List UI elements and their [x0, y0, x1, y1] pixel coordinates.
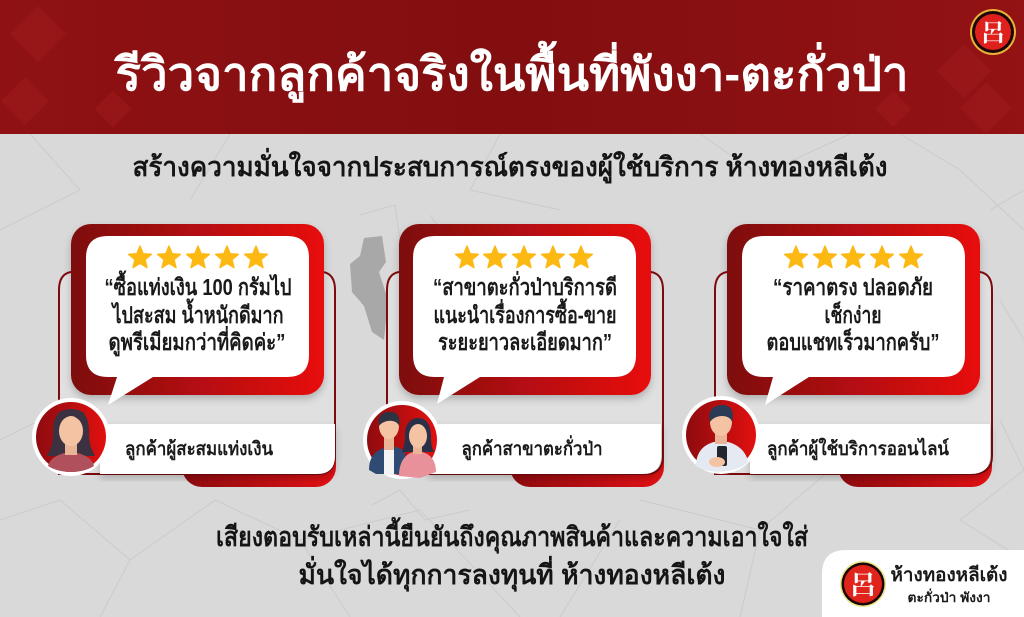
- icon: woman avatar: [32, 398, 110, 476]
- map silhouette: [350, 236, 388, 340]
- frame: [59, 272, 335, 474]
- quote text: ไปสะสม น้ำหนักดีมาก: [110, 298, 284, 328]
- icon: couple avatar: [363, 401, 441, 479]
- logo emblem: [840, 561, 886, 607]
- star rating: [456, 246, 592, 268]
- brand name: ห้างทองหลีเต้ง: [890, 564, 1008, 586]
- header banner: [0, 0, 1024, 134]
- quote text: “ซื้อแท่งเงิน 100 กรัมไป: [104, 270, 292, 300]
- background map lines: [0, 134, 1024, 617]
- frame: [715, 272, 992, 474]
- white name strip: [428, 424, 661, 474]
- lower red tab: [838, 400, 992, 487]
- quote text: ระยะยาวละเอียดมาก”: [438, 329, 612, 355]
- panel: review card 2: [363, 224, 664, 487]
- header logo: 呂: [981, 13, 1005, 48]
- quote text: ตอบแชทเร็วมากครับ”: [766, 327, 940, 355]
- quote text: [766, 274, 940, 355]
- icon: man with phone avatar: [682, 396, 760, 474]
- white name strip: [100, 424, 335, 474]
- star rating: [785, 246, 922, 268]
- white name strip: [750, 424, 990, 474]
- logo emblem: 呂: [850, 565, 876, 602]
- speech bubble: [413, 236, 636, 404]
- red quote box: [727, 224, 980, 395]
- subtitle: สร้างความมั่นใจจากประสบการณ์ตรงของผู้ใช้บริการ ห้างทองหลีเต้ง: [132, 147, 888, 184]
- brand location: ตะกั่วป่า พังงา: [908, 588, 990, 605]
- quote text: เช็กง่าย: [824, 300, 882, 328]
- customer label: ลูกค้าผู้สะสมแท่งเงิน: [125, 438, 273, 461]
- closing statement: เสียงตอบรับเหล่านี้ยืนยันถึงคุณภาพสินค้าและความเอาใจใส่: [216, 516, 808, 554]
- panel: review card 1: [32, 224, 336, 487]
- quote text: [104, 270, 292, 357]
- header logo: [970, 9, 1016, 55]
- lower red tab: [182, 400, 336, 487]
- closing statement: มั่นใจได้ทุกการลงทุนที่ ห้างทองหลีเต้ง: [298, 555, 726, 592]
- panel: review card 3: [682, 224, 992, 487]
- title: รีวิวจากลูกค้าจริงในพื้นที่พังงา-ตะกั่วป่า: [113, 40, 909, 103]
- brand logo box: [822, 550, 1024, 617]
- quote text: “ราคาตรง ปลอดภัย: [773, 274, 933, 300]
- lower red tab: [510, 400, 664, 487]
- quote text: “สาขาตะกั่วป่าบริการดี: [433, 270, 617, 300]
- star rating: [129, 246, 267, 268]
- quote text: แนะนำเรื่องการซื้อ-ขาย: [434, 298, 616, 328]
- speech bubble: [742, 236, 965, 405]
- customer label: ลูกค้าผู้ใช้บริการออนไลน์: [767, 437, 949, 461]
- customer label: ลูกค้าสาขาตะกั่วป่า: [462, 435, 602, 461]
- closing statement: [216, 516, 808, 592]
- red quote box: [71, 224, 324, 395]
- quote text: ดูพรีเมียมกว่าที่คิดค่ะ”: [108, 325, 286, 357]
- frame: [387, 272, 663, 474]
- red quote box: [399, 224, 651, 395]
- speech bubble: [86, 236, 309, 405]
- quote text: [433, 270, 617, 355]
